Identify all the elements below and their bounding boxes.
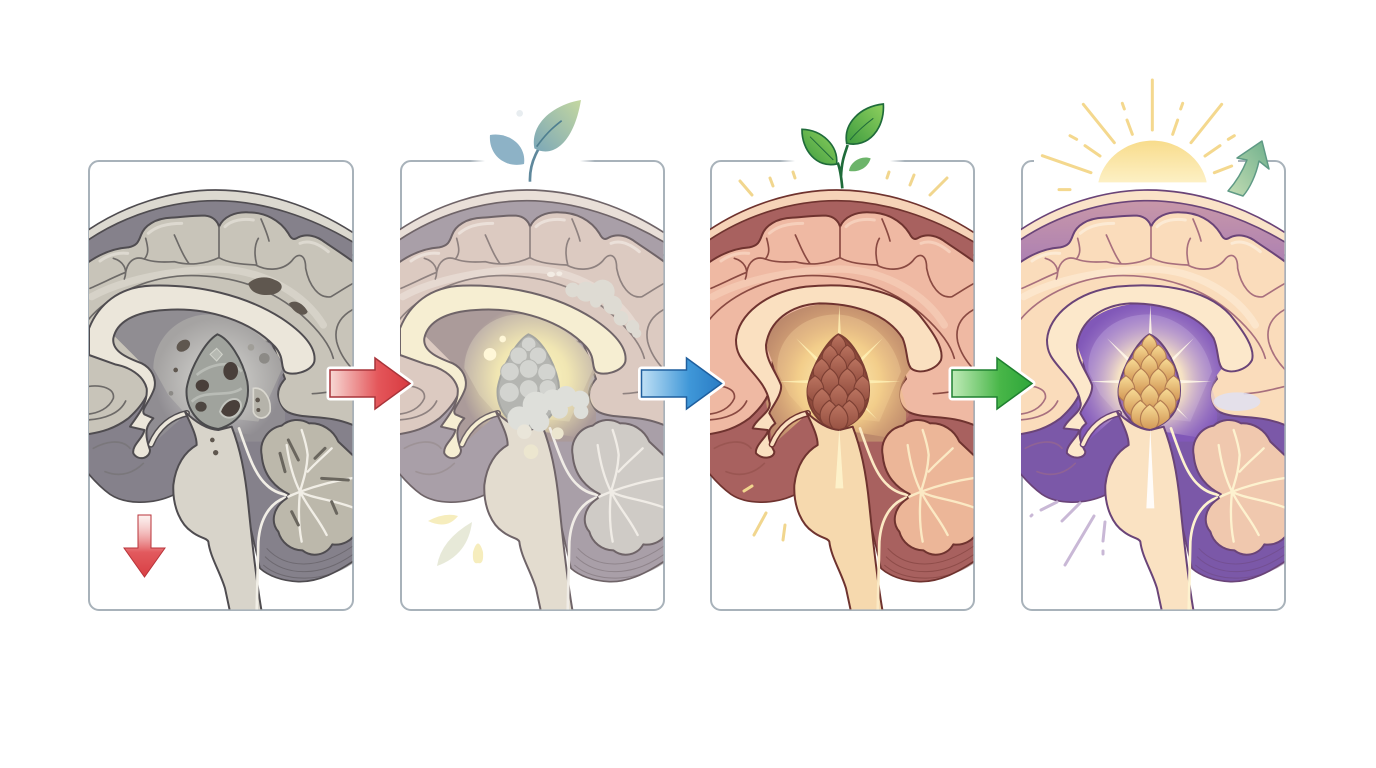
- pineal gland: healthy brown cone: [806, 334, 871, 432]
- light ray down stem: [1146, 428, 1154, 508]
- pineal gland: grey bumpy: [498, 334, 559, 429]
- border gap behind sprout: [780, 155, 905, 169]
- panel 4: radiant restored brain: [1019, 80, 1289, 612]
- clearing plaque cloud: [484, 271, 641, 361]
- icon: rising sun: [1042, 80, 1234, 190]
- border gap behind sprout: [470, 155, 595, 169]
- icon: green sprout: [802, 104, 883, 188]
- lesions: dark cortical spots: [169, 277, 348, 525]
- arrow: blue, stage 2 to 3: [642, 358, 722, 409]
- back lobe glow: [1214, 392, 1260, 411]
- arrow: red, stage 1 to 2: [330, 358, 410, 409]
- pineal gland: damaged with dark holes: [187, 334, 248, 429]
- faint recovery sparks: [428, 515, 483, 566]
- icon: faded sprout: [490, 100, 581, 182]
- smog around gland: [507, 386, 589, 459]
- sparks below brain: [1031, 502, 1105, 565]
- panel 3: healthy pink brain: [708, 104, 978, 612]
- sparks around brain: [740, 172, 947, 540]
- panel 1: damaged grey brain: [87, 161, 357, 612]
- debris beside gland: [253, 388, 270, 418]
- icon: green upward arrow: [1228, 141, 1269, 196]
- pineal gland: golden cone: [1117, 334, 1182, 432]
- icon: red decline arrow: [124, 515, 165, 577]
- panel 2: healing brain: [398, 100, 668, 612]
- border gap behind sun: [1034, 155, 1238, 169]
- light rays over stem: [835, 428, 843, 488]
- arrow: green, stage 3 to 4: [952, 358, 1032, 409]
